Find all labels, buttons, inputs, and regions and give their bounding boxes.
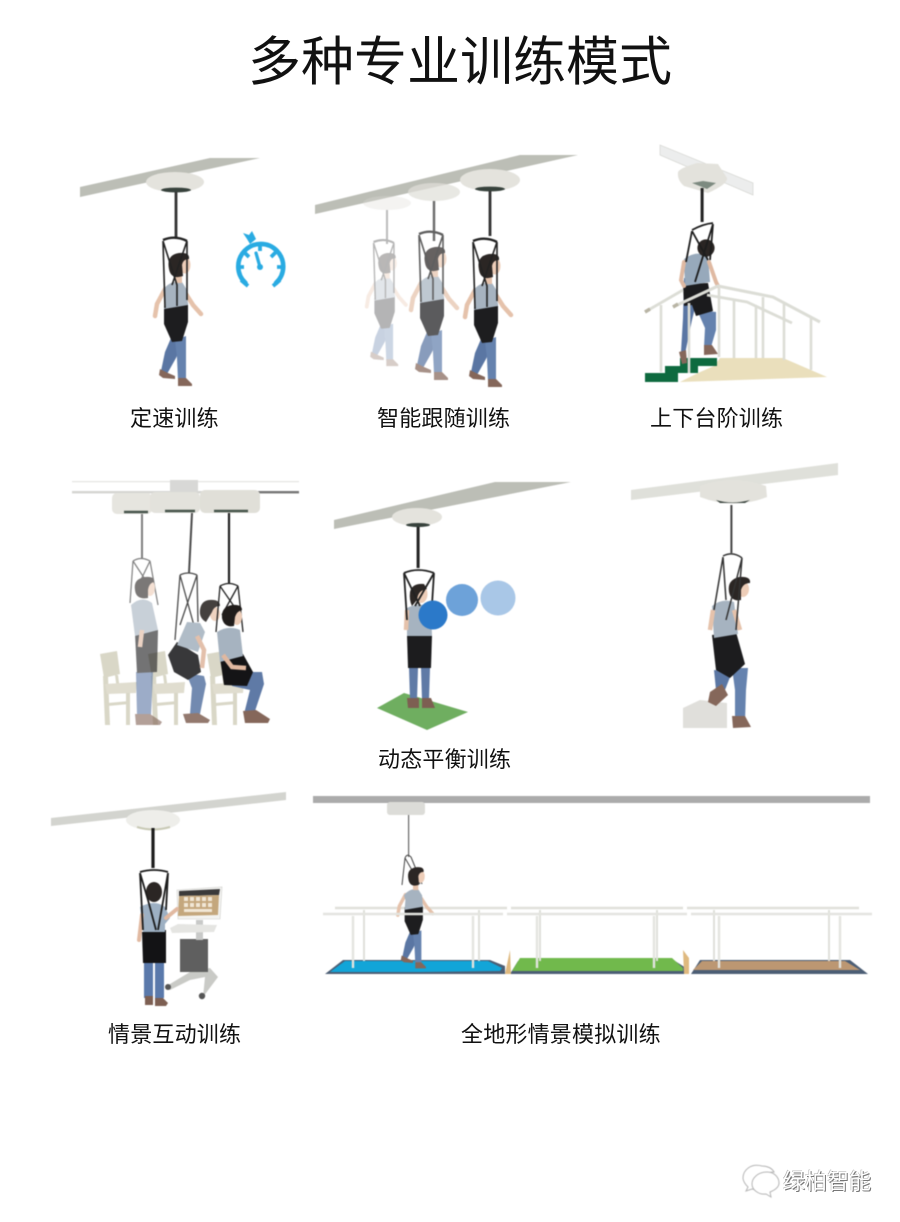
ceiling rail [313, 796, 870, 803]
parallel bars near side [323, 914, 872, 968]
ceiling rail [334, 482, 571, 529]
title: 多种专业训练模式 [248, 33, 672, 92]
panel: stair training [645, 145, 827, 382]
grass floor mat [510, 958, 686, 974]
touchscreen cart [165, 887, 222, 999]
suspension rod [417, 527, 420, 568]
label: constant speed: 定速训练 [130, 406, 219, 431]
hoist unit [146, 172, 204, 192]
green steps [645, 358, 717, 382]
ceiling rail [315, 155, 578, 214]
hoist units [112, 490, 260, 514]
grey step box [683, 700, 727, 728]
seated figure [216, 513, 270, 723]
patient seen from behind [139, 870, 177, 1006]
ceiling rail [72, 480, 299, 493]
suspension rod [175, 192, 177, 237]
panel: step-up training [631, 463, 838, 728]
climbing patient [679, 223, 718, 364]
stepping patient [708, 554, 751, 728]
label: interactive scene: 情景互动训练 [108, 1022, 241, 1047]
bending figure [168, 513, 220, 723]
wooden platform [680, 358, 827, 382]
faded following figure 2 [408, 183, 460, 380]
ceiling rail [80, 158, 260, 197]
hoist unit [126, 810, 180, 830]
suspension rod [408, 815, 409, 857]
suspension rod [151, 828, 155, 868]
standing figure [130, 514, 162, 725]
label: stairs: 上下台阶训练 [650, 406, 783, 431]
panel: interactive scene training [51, 792, 286, 1006]
handrails [645, 286, 820, 373]
hoist unit [678, 163, 727, 193]
walking patient [398, 855, 433, 968]
suspension rod [701, 188, 704, 222]
panel: dynamic balance training [334, 482, 571, 730]
icon: wechat watermark [743, 1165, 779, 1197]
label: intelligent following: 智能跟随训练 [377, 406, 510, 431]
faded following figure 1 [363, 196, 411, 366]
panel: intelligent following training [315, 155, 578, 387]
leading figure [460, 169, 520, 387]
ceiling rail [51, 792, 286, 826]
chairs [100, 651, 244, 725]
gravel floor mat [691, 960, 868, 974]
panel: constant speed training [80, 158, 284, 386]
green balance mat [377, 693, 468, 730]
panel: sit-to-stand training [72, 480, 299, 725]
balancing patient [404, 570, 435, 708]
watermark text: 绿柏智能 [783, 1169, 871, 1194]
hoist unit [392, 508, 442, 527]
hoist unit [387, 802, 425, 815]
hoist unit [700, 480, 767, 504]
ceiling rail [660, 145, 753, 195]
ceiling rail [631, 463, 838, 500]
wooden dividers [505, 950, 689, 974]
blue floor mat [325, 960, 505, 974]
icon: speedometer [237, 231, 284, 286]
blue balls [418, 580, 516, 630]
label: all-terrain: 全地形情景模拟训练 [461, 1022, 661, 1047]
label: dynamic balance: 动态平衡训练 [378, 747, 511, 772]
parallel bars far side [335, 908, 859, 961]
suspension rod [730, 505, 732, 553]
walking patient in harness [155, 238, 201, 386]
panel: all-terrain scene simulation training [313, 796, 872, 974]
